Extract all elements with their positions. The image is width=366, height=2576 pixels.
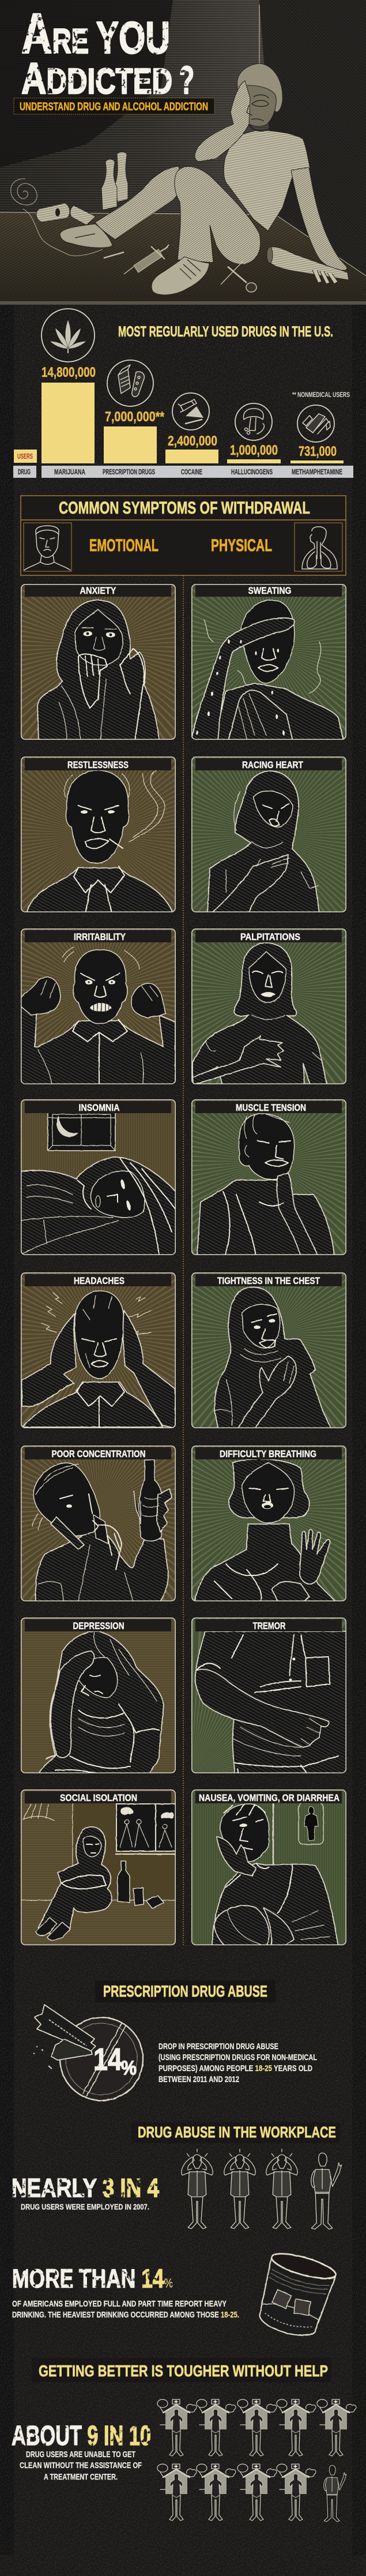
icon: broken pill and razor blade: [33, 2005, 143, 2101]
figure: shaking arm and torso: [195, 1631, 346, 1774]
row label: drug: DRUG: [18, 467, 31, 476]
text: drop in prescription drug abuse: [159, 2042, 317, 2084]
subtitle banner: [14, 98, 214, 114]
label: ANXIETY: [80, 585, 116, 596]
bars: [41, 383, 344, 463]
label: [25, 585, 171, 597]
label: IRRITABILITY: [74, 931, 126, 942]
figure: anxious woman: [37, 600, 159, 741]
label: RESTLESSNESS: [67, 759, 129, 770]
icon: tin cans: [36, 203, 96, 225]
value labels: 7,000,000**: [105, 409, 165, 425]
label: POOR CONCENTRATION: [52, 1448, 145, 1459]
icon: whiskey glass: [252, 2249, 338, 2342]
text: drug users employed: DRUG USERS WERE EMPLOYED IN 2007.: [21, 2202, 149, 2211]
label: [195, 930, 342, 942]
panel: restlessness: [21, 757, 176, 912]
drug name row: [41, 466, 353, 478]
figure: smoking man: [27, 763, 173, 913]
icon: marijuana leaf: [41, 309, 95, 362]
label: SWEATING: [248, 585, 292, 596]
panel: sweating: [191, 584, 346, 740]
hero panel: man with head in hand: [0, 0, 366, 305]
figure: sweating man: [191, 600, 344, 741]
pictogram: nine of ten in treatment: [157, 2399, 356, 2522]
heading: getting better: [32, 2358, 331, 2382]
drug name row: HALLUCINOGENS: [231, 467, 273, 476]
icon: smoke spiral and wire: [11, 179, 103, 256]
panel: racing heart: [191, 757, 346, 912]
drug name row: PRESCRIPTION DRUGS: [103, 467, 155, 476]
text: treatment center: CLEAN WITHOUT THE ASSISTANCE OF: [20, 2461, 142, 2470]
panel: nausea, vomiting, or diarrhea: [191, 1789, 346, 1945]
label: HEADACHES: [74, 1275, 124, 1286]
label: DIFFICULTY BREATHING: [220, 1448, 316, 1459]
figure: woman holding chest: [207, 771, 319, 913]
label: [25, 930, 171, 942]
row label: users: USERS: [17, 452, 33, 460]
figure: man on phone holding bottle: [32, 1460, 172, 1601]
label: INSOMNIA: [78, 1102, 120, 1113]
icon: syringe: [104, 245, 169, 274]
panel: social isolation: [21, 1789, 176, 1945]
drug name row: MARIJUANA: [54, 467, 85, 476]
text: treatment center: DRUG USERS ARE UNABLE TO GET: [26, 2450, 135, 2459]
title: ARE YOU: [21, 2, 170, 65]
label: TIGHTNESS IN THE CHEST: [217, 1275, 320, 1286]
panel: palpitations: [191, 928, 346, 1084]
stat: more than 14 percent: MORE THAN 14%: [12, 2264, 173, 2293]
panel: headaches: [21, 1272, 176, 1428]
label: [195, 1619, 342, 1631]
text: drop in prescription drug abuse: DROP IN PRESCRIPTION DRUG ABUSE: [159, 2042, 278, 2051]
figure: woman with hand on chest: [193, 943, 327, 1085]
text: heavy drinking: DRINKING. THE HEAVIEST DRINKING OCCURRED AMONG THOSE 18-25.: [12, 2311, 239, 2320]
icon: cocaine: [172, 393, 209, 430]
panel: poor concentration: [21, 1446, 176, 1601]
panel: tremor: [191, 1618, 346, 1773]
value labels: 731,000: [299, 444, 337, 459]
label: [195, 1101, 342, 1113]
text: drop in prescription drug abuse: (USING PRESCRIPTION DRUGS FOR NON-MEDICAL: [159, 2053, 317, 2062]
value labels: 1,000,000: [230, 443, 278, 458]
figure: girl hugging knees: [36, 1827, 112, 1940]
icon: spoon: [221, 261, 256, 292]
label: RACING HEART: [242, 759, 303, 770]
label: PALPITATIONS: [240, 931, 300, 942]
panel: irritability: [21, 928, 176, 1084]
label: TREMOR: [252, 1620, 286, 1631]
stat: 14 percent: %: [121, 2057, 137, 2079]
icon: hallucinogens: [235, 403, 272, 440]
icon: methamphetamine: [297, 405, 334, 442]
title: ?: [179, 58, 194, 102]
icon: prescription drugs: [107, 360, 153, 406]
pictogram: three of four workers: [182, 2149, 342, 2229]
value labels: [41, 365, 337, 459]
stat: 14 percent: 14: [93, 2042, 122, 2077]
title: [14, 2, 198, 103]
figure: woman lying awake: [21, 1157, 176, 1256]
label: [25, 758, 171, 770]
icon: lungs box: [295, 523, 342, 571]
icon: night window and moon: [48, 1110, 115, 1151]
text: treatment center: A TREATMENT CENTER.: [44, 2473, 118, 2482]
drug name row: COCAINE: [181, 467, 202, 476]
panel: muscle tension: [191, 1099, 346, 1255]
label: [25, 1619, 171, 1631]
label: [25, 1791, 171, 1803]
icon: bottle in hand: [267, 247, 349, 284]
label: emotional: EMOTIONAL: [89, 536, 159, 555]
figure: seated man: [60, 63, 347, 295]
heading: prescription drug abuse: [95, 1980, 276, 2002]
stat: about 9 in 10: ABOUT 9 IN 10: [12, 2421, 151, 2451]
figure: sad woman with head in hand: [38, 1631, 164, 1774]
figure: man gripping neck: [197, 1114, 334, 1256]
panel: insomnia: [21, 1099, 176, 1255]
row label: drug: [13, 466, 36, 478]
text: heavy drinking: [12, 2300, 239, 2320]
panel: anxiety: [21, 584, 176, 740]
label: [25, 1274, 171, 1286]
panel: depression: [21, 1618, 176, 1773]
illustration: room with window: [21, 1803, 176, 1908]
panel: tightness in the chest: [191, 1272, 346, 1428]
label: [195, 585, 342, 597]
panel: common symptoms of withdrawal header: [21, 496, 346, 575]
label: [25, 1101, 171, 1113]
figure: woman gasping: [195, 1459, 335, 1601]
text: drop in prescription drug abuse: BETWEEN 2011 AND 2012: [159, 2075, 239, 2084]
drug name row: METHAMPHETAMINE: [292, 467, 342, 476]
value labels: 2,400,000: [168, 433, 217, 449]
text: treatment center: [20, 2450, 142, 2482]
row label: users: [14, 450, 37, 463]
label: SOCIAL ISOLATION: [60, 1792, 137, 1803]
icon: two bottles: [101, 152, 128, 210]
figure: nauseous man: [212, 1804, 338, 1946]
label: MUSCLE TENSION: [236, 1102, 306, 1113]
text: drop in prescription drug abuse: PURPOSES) AMONG PEOPLE 18-25 YEARS OLD: [159, 2064, 312, 2073]
figure: woman clutching chest: [214, 1287, 331, 1429]
panel: difficulty breathing: [191, 1446, 346, 1601]
text: heavy drinking: OF AMERICANS EMPLOYED FULL AND PART TIME REPORT HEAVY: [12, 2300, 227, 2309]
illustration: restroom door sign: [273, 1803, 323, 1870]
value labels: 14,800,000: [41, 365, 96, 380]
icon: sad face box: [24, 523, 71, 571]
label: [195, 758, 342, 770]
figure: angry man with fists: [21, 950, 175, 1085]
bar chart: users by drug: [13, 309, 353, 478]
stat: nearly 3 in 4: NEARLY 3 IN 4: [12, 2173, 159, 2203]
subtitle banner: UNDERSTAND DRUG AND ALCOHOL ADDICTION: [20, 101, 208, 113]
label: DEPRESSION: [73, 1620, 124, 1631]
title: ADDICTED: [21, 54, 172, 103]
label: physical: PHYSICAL: [211, 536, 272, 555]
figure: man holding head: [22, 1291, 175, 1429]
heading: prescription drug abuse: PRESCRIPTION DRUG ABUSE: [103, 1982, 267, 2000]
